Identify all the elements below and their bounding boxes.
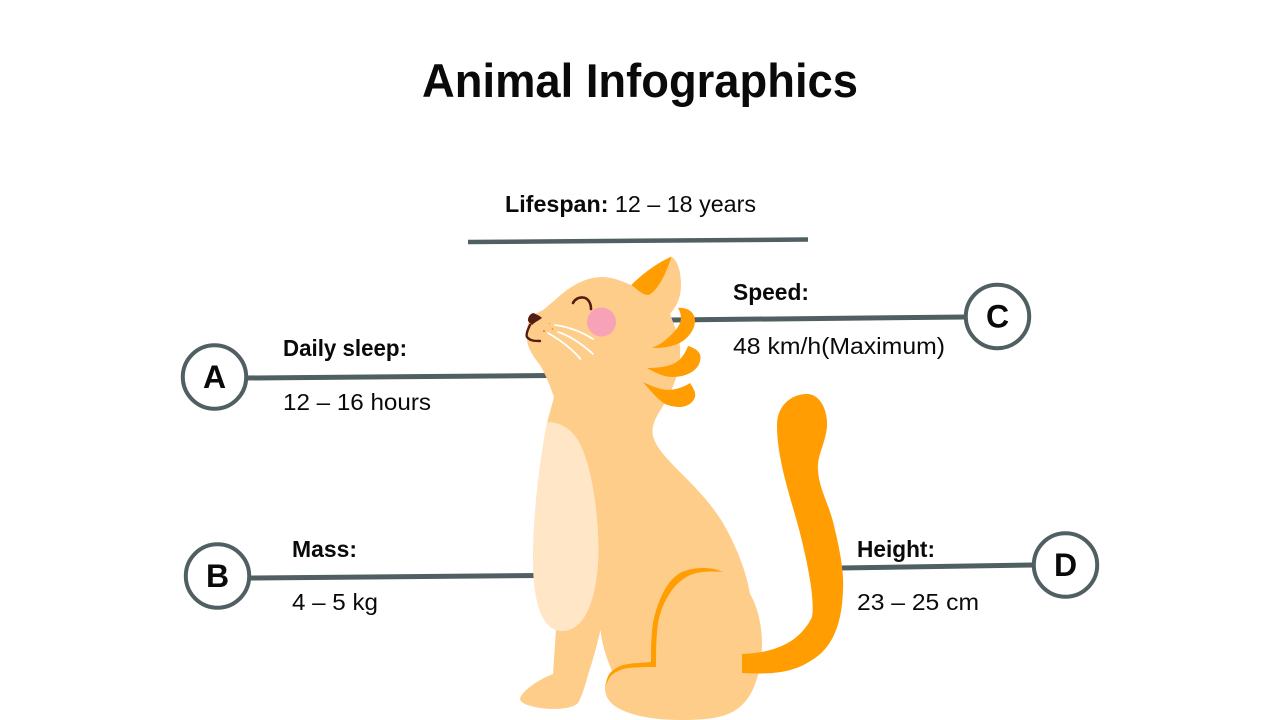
text: mass [292,536,378,615]
text: height: 23 – 25 cm [857,589,979,615]
cat tail [742,394,843,674]
badge B: B [206,558,229,594]
text: height [857,536,979,615]
badge D: D [1054,547,1077,583]
cat illustration [520,256,843,720]
connector: speed [670,317,966,320]
cat closed eye [573,297,591,309]
text: mass: Mass: [292,536,357,562]
text: height: Height: [857,536,935,562]
badge A: A [203,359,226,395]
text: daily sleep [283,335,431,415]
badge C [966,285,1029,348]
text: daily sleep: Daily sleep: [283,335,407,361]
connector: daily sleep [247,376,550,378]
lifespan label: Lifespan: 12 – 18 years [505,191,756,217]
connector: mass [250,576,540,578]
badge B [186,544,249,608]
cat nose and mouth [527,313,542,341]
cat ear [632,256,672,295]
cat cheek [587,308,616,336]
cat stripes [652,308,695,348]
badge A [183,345,246,409]
connector: height [840,565,1033,568]
text: speed [733,279,945,359]
cat whiskers [548,325,593,359]
cat foreleg highlight [533,422,598,631]
cat haunch line [606,568,723,688]
text: daily sleep: 12 – 16 hours [283,389,431,415]
text: mass: 4 – 5 kg [292,589,378,615]
cat body [520,257,762,720]
badge C: C [986,298,1009,334]
badge D [1034,533,1097,597]
title: Animal Infographics [422,54,858,107]
cat muzzle dots [543,323,553,332]
text: speed: 48 km/h(Maximum) [733,333,945,359]
text: speed: Speed: [733,279,809,305]
